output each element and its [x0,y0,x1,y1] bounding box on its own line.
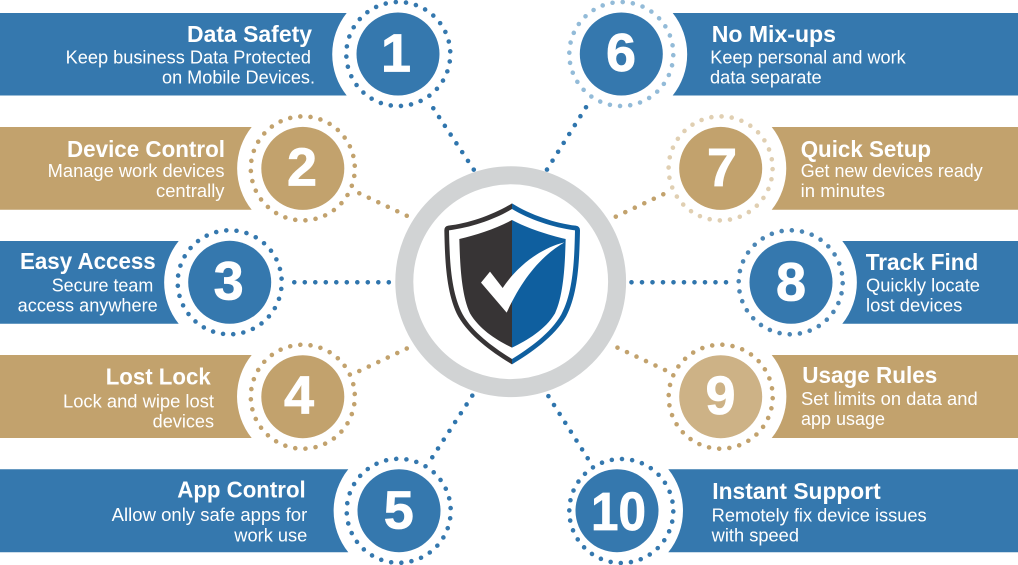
banner [0,127,252,210]
description: Lock and wipe lost [63,391,214,411]
description [801,389,978,429]
description: Keep business Data Protected [66,48,311,68]
description: Allow only safe apps for [112,505,307,525]
icon: shield with checkmark [444,203,580,364]
banner [673,13,1018,96]
dotted ring [738,229,844,335]
connector: item 10 to center [548,396,588,458]
description: work use [233,526,307,546]
connector: item 3 to center [294,280,390,285]
description [63,391,214,432]
dotted ring [344,456,453,565]
heading: Lost Lock [106,363,211,389]
description [710,48,907,88]
number badge [261,355,344,438]
number: 4 [284,365,314,425]
description: Remotely fix device issues [712,506,927,526]
description: with speed [711,526,799,546]
heading: Device Control [67,136,225,162]
heading: Usage Rules [802,362,937,388]
number: 1 [381,24,411,84]
number badge [188,241,271,324]
description: on Mobile Devices. [162,68,315,88]
description: Quickly locate [866,276,980,296]
heading: No Mix-ups [712,21,836,47]
description: data separate [710,68,822,88]
number badge [679,127,762,210]
number: 5 [384,480,414,540]
description: Get new devices ready [801,161,983,181]
banner [0,355,252,438]
dotted ring [174,227,285,338]
number: 7 [707,138,737,198]
number: 6 [606,23,636,83]
number: 8 [776,252,806,312]
connector: item 4 to center [359,348,407,371]
number badge [679,355,762,438]
description: centrally [156,181,224,201]
dotted ring [344,0,453,109]
number: 10 [591,482,646,542]
item 7: Quick Setup [668,116,1018,221]
connector: item 8 to center [631,280,726,285]
dotted ring [668,116,773,221]
item 4: Lost Lock [0,342,357,451]
number: 9 [705,366,736,426]
number badge [358,469,440,552]
heading: Data Safety [187,21,312,47]
description [866,276,980,316]
dotted ring [248,114,357,223]
item 5: App Control [0,456,453,565]
description: Set limits on data and [801,389,978,409]
item 8: Track Find [738,229,1018,335]
item 9: Usage Rules [667,343,1018,450]
description [66,48,315,88]
description: lost devices [866,296,962,316]
item 1: Data Safety [0,0,453,109]
connector: item 2 to center [359,193,407,216]
dotted ring [569,459,674,563]
description: in minutes [801,181,885,201]
dotted ring [248,342,357,451]
heading: Instant Support [712,478,881,504]
number badge [580,12,663,96]
description: devices [153,412,214,432]
central emblem [404,175,617,388]
item 3: Easy Access [0,227,285,338]
number badge [576,469,658,552]
description [112,505,307,546]
description: access anywhere [18,296,158,316]
item 6: No Mix-ups [568,1,1018,107]
description [48,161,225,201]
dotted ring [568,1,674,107]
description [18,276,158,316]
connector: item 1 to center [433,108,474,170]
dotted ring [667,343,774,450]
heading: Track Find [866,249,978,275]
center ring [404,175,617,388]
item 10: Instant Support [569,459,1018,563]
banner [772,127,1018,210]
item 2: Device Control [0,114,357,223]
description [801,161,983,201]
description: Secure team [52,276,153,296]
heading: Easy Access [20,248,156,274]
description: Manage work devices [48,161,225,181]
heading: Quick Setup [801,136,931,162]
banner [772,355,1018,438]
banner [842,241,1018,324]
number: 3 [214,252,244,312]
number badge [261,127,344,210]
banner [0,469,348,552]
description: app usage [801,409,885,429]
connector: item 5 to center [432,395,473,457]
number badge [356,12,440,96]
connector: item 7 to center [616,194,663,217]
banner [0,241,179,324]
connector: item 6 to center [547,107,586,170]
description: Keep personal and work [710,48,907,68]
banner [668,469,1018,552]
banner [0,13,347,96]
number badge [750,241,832,324]
connector: item 9 to center [617,347,665,370]
description [711,506,927,546]
number: 2 [287,138,317,198]
heading: App Control [177,476,306,502]
